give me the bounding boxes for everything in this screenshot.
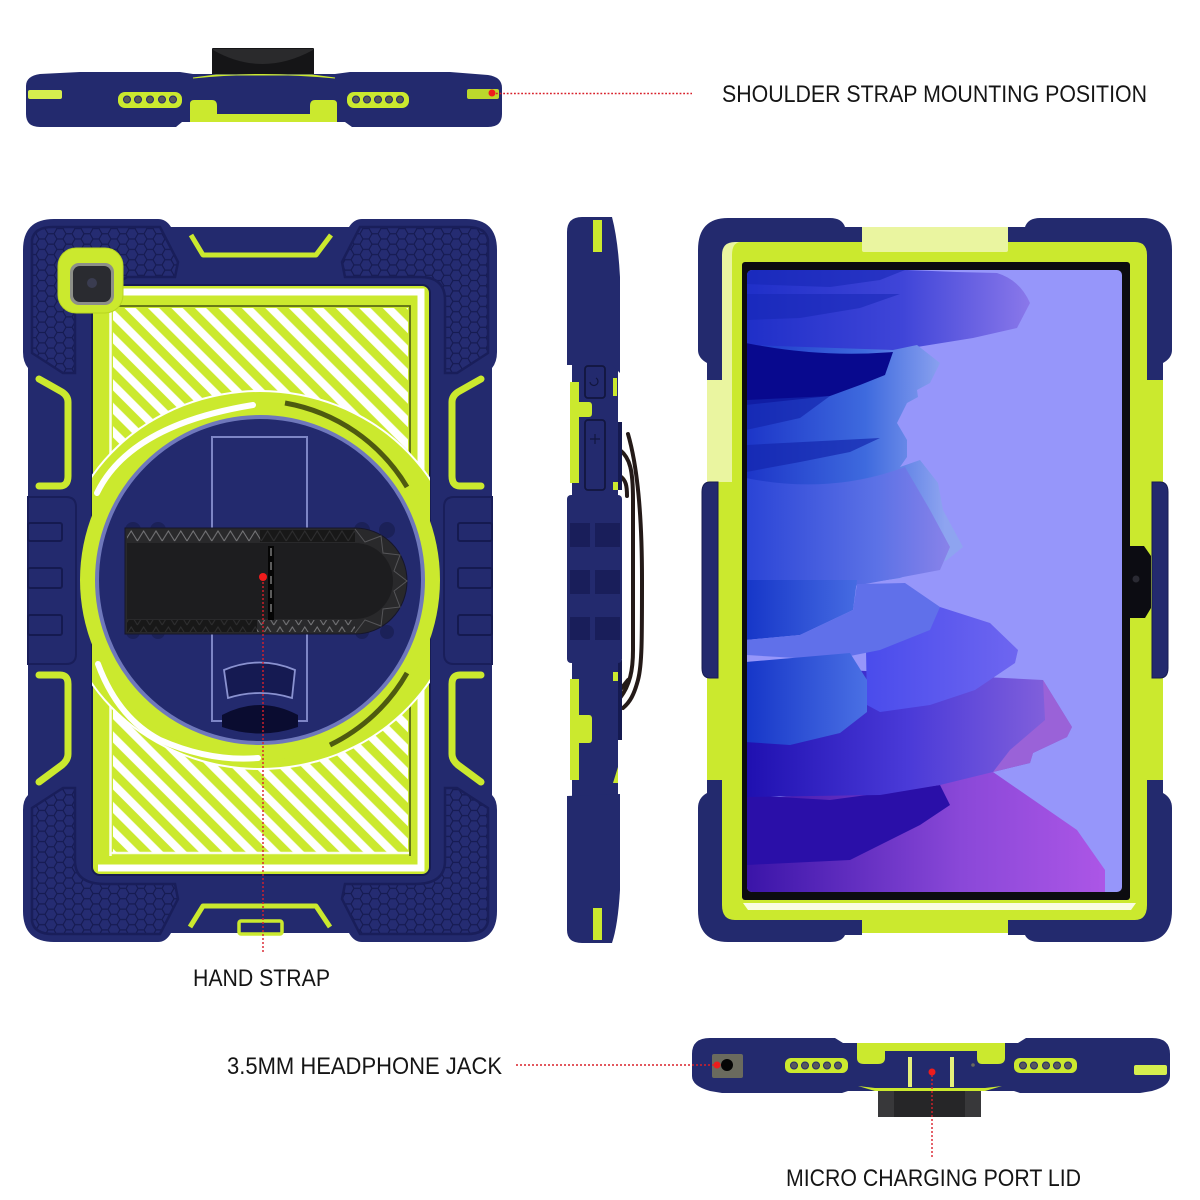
label: hand strap: HAND STRAP (193, 965, 330, 992)
camera cutout (58, 248, 123, 313)
back view of case (23, 219, 497, 942)
side lower section (567, 794, 620, 943)
side grip section (567, 495, 622, 663)
side buttons (585, 366, 605, 490)
wallpaper blue lobes (746, 580, 857, 640)
bottom edge view of case (692, 1038, 1170, 1117)
side view of case (567, 217, 642, 943)
side middle sections (572, 362, 618, 497)
wallpaper dark mass (746, 785, 950, 865)
front view of case (698, 218, 1172, 942)
wallpaper top layers (746, 270, 1030, 352)
screen bezel (742, 262, 1130, 900)
button glyphs (590, 378, 600, 444)
top edge view of case (26, 48, 502, 127)
pale frame highlights (707, 227, 1008, 482)
label: shoulder strap mounting position: SHOULDER STRAP MOUNTING POSITION (722, 81, 1147, 108)
lime side accents (39, 379, 481, 782)
side body upper (567, 217, 620, 373)
lime frame (707, 227, 1163, 933)
kickstand (212, 437, 307, 734)
label: micro charging port lid: MICRO CHARGING PORT LID (786, 1165, 1081, 1192)
wallpaper pink bottom (746, 772, 1105, 892)
camera notch (1128, 546, 1151, 618)
lime top and bottom accents (191, 235, 331, 255)
wallpaper lower violet mass (746, 665, 1072, 797)
rotating ring (80, 400, 440, 760)
case body (23, 219, 497, 942)
striped panels (110, 306, 410, 856)
hand strap side profile (620, 434, 642, 708)
icon: strap bottom (878, 1090, 981, 1117)
ring surround (92, 390, 430, 770)
wallpaper middle layers (746, 345, 963, 585)
callout line: charging port lid (931, 1075, 933, 1158)
lime inner panel (92, 285, 430, 875)
tablet screen wallpaper (746, 268, 1124, 894)
callout line: hand strap (262, 582, 264, 952)
corner bumpers (698, 218, 1172, 942)
lime side bars (570, 378, 618, 783)
icon: black hand strap (125, 522, 407, 639)
corner grip textures (32, 227, 488, 934)
charging port cover on back (239, 921, 282, 934)
side buttons (702, 482, 1168, 678)
bottom highlight (743, 903, 1136, 910)
label: 3.5mm headphone jack: 3.5MM HEADPHONE JACK (227, 1053, 502, 1080)
wallpaper violet lobe (866, 607, 1018, 712)
callout line: headphone jack (516, 1064, 717, 1066)
side dark strips (618, 422, 622, 740)
side grip blocks (28, 497, 492, 664)
icon: shoulder strap top (212, 48, 314, 76)
callout line: shoulder strap (496, 92, 692, 94)
